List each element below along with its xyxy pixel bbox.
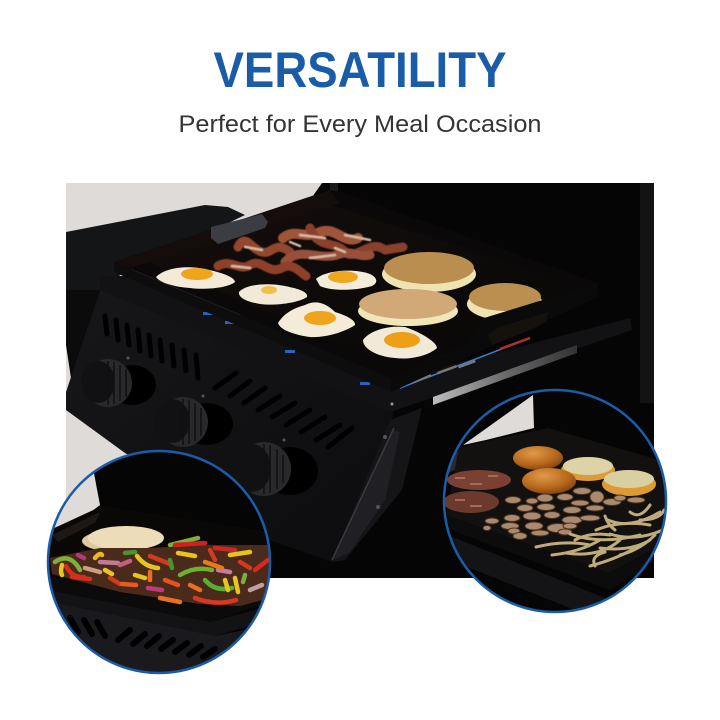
title: VERSATILITY <box>214 42 506 98</box>
buns <box>513 446 563 470</box>
grill lid and right side <box>240 183 654 578</box>
onions <box>536 505 664 566</box>
griddle <box>50 509 95 543</box>
subtitle: Perfect for Every Meal Occasion <box>178 111 542 138</box>
inset circle: fajitas <box>48 451 270 673</box>
beef and peppers <box>50 545 270 606</box>
griddle plate <box>114 190 479 388</box>
main photo: griddle on grill <box>66 183 654 578</box>
pancakes <box>358 252 543 326</box>
griddle handle right <box>400 300 548 388</box>
griddle <box>446 428 666 573</box>
knob 2 <box>170 397 233 447</box>
knob 3 <box>250 442 318 496</box>
inset circle: burgers, mushrooms and onions <box>443 390 666 620</box>
tortillas <box>82 534 105 550</box>
mushrooms <box>483 488 645 540</box>
fried eggs <box>156 267 437 359</box>
knob 1 <box>94 359 156 407</box>
griddle base rail <box>100 276 632 412</box>
side shelf <box>66 205 245 290</box>
griddle handle left <box>211 214 268 244</box>
vent slots <box>105 316 352 447</box>
left side body <box>66 290 100 378</box>
control panel <box>66 285 422 562</box>
screws <box>126 356 387 509</box>
vent slots <box>70 618 215 657</box>
burger patties <box>443 470 511 513</box>
bacon <box>218 228 403 276</box>
